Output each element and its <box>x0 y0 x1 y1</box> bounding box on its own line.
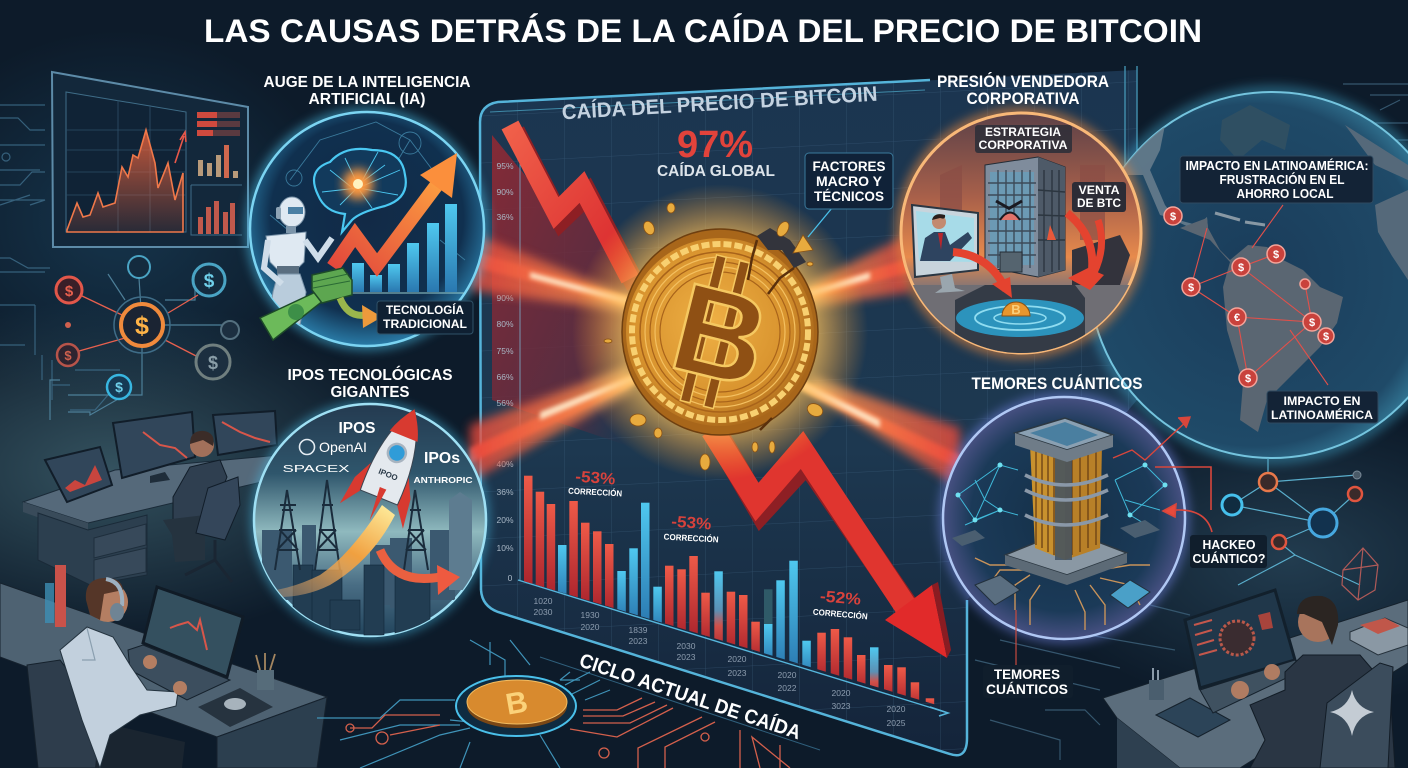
red arrow to pool <box>953 252 1012 298</box>
person <box>173 460 227 527</box>
year labels: 2020 <box>778 670 797 680</box>
red area under arrow <box>492 135 640 450</box>
red arrow of selling <box>1067 213 1104 290</box>
north america <box>1220 105 1290 160</box>
correction labels: -52% <box>819 588 862 609</box>
desk <box>23 455 280 523</box>
green to orange arrow <box>340 298 366 315</box>
label: current cycle: CICLO ACTUAL DE CAÍDA <box>577 649 804 744</box>
skyline <box>262 492 472 608</box>
year labels: 2023 <box>728 668 747 678</box>
blue bars <box>352 204 457 292</box>
IPO company labels <box>282 420 472 485</box>
central chart panel <box>480 66 1137 755</box>
monitors <box>45 447 112 502</box>
glowing brain <box>314 149 406 232</box>
red trend arrow beyond quantum bubble <box>1113 417 1190 460</box>
tablet <box>1156 698 1230 737</box>
correction labels: -53% <box>671 514 712 533</box>
person and chair <box>27 660 112 768</box>
map nodes <box>1164 207 1334 387</box>
left circuit traces <box>0 105 120 410</box>
circuit traces <box>975 558 1150 630</box>
oil derricks <box>275 480 428 570</box>
label: BTC sale: DE BTC <box>1077 196 1121 210</box>
year labels <box>534 596 906 728</box>
bubble: globe Latin America: $ <box>1323 331 1329 343</box>
hack pointer <box>1155 467 1212 532</box>
IPO company labels: SPACEX <box>282 464 350 475</box>
central dollar node: $ <box>135 312 149 340</box>
red curved arrow <box>380 550 440 578</box>
correction labels: CORRECCIÓN <box>568 485 622 498</box>
callout: macro and technical factors: FACTORES <box>812 159 886 174</box>
watermark star <box>1330 690 1374 736</box>
callout: macro and technical factors: TÉCNICOS <box>814 189 884 204</box>
label: quantum hack: HACKEO <box>1202 537 1256 552</box>
flame trail <box>278 505 395 597</box>
label: impact in Latin America with frustration: IMPACTO EN LATINOAMÉRICA: <box>1186 158 1368 173</box>
analyst on the right <box>1103 590 1408 768</box>
year labels: 2020 <box>887 704 906 714</box>
analyst at front desk <box>0 565 327 768</box>
ground and pool <box>912 285 1130 353</box>
network mesh <box>958 465 1165 530</box>
person <box>1250 655 1395 768</box>
bar chart <box>524 476 934 713</box>
callout: macro and technical factors <box>805 153 893 237</box>
y axis labels: 36% <box>496 212 514 222</box>
red falling arrow <box>510 125 951 658</box>
y axis labels: 40% <box>496 459 514 469</box>
south america <box>1180 218 1343 432</box>
laptop <box>143 587 243 677</box>
network of currency nodes: $ <box>208 353 218 373</box>
wall screen with rising chart <box>52 72 248 247</box>
chart heading: CAÍDA DEL PRECIO DE BITCOIN <box>561 83 878 124</box>
rocket: IPOO <box>377 467 399 483</box>
y axis labels: 0 <box>508 573 513 583</box>
correction labels: CORRECCIÓN <box>663 531 719 544</box>
mouse pad, mouse and pen cup <box>198 688 273 727</box>
label: impact in Latin America with frustration: FRUSTRACIÓN EN EL <box>1220 172 1345 187</box>
year labels: 2025 <box>887 718 906 728</box>
heading: artificial intelligence: AUGE DE LA INTELIGENCIA <box>264 74 471 91</box>
label: traditional technology: TECNOLOGÍA <box>386 302 464 317</box>
year labels: 1839 <box>629 625 648 635</box>
label: impact in Latin America: IMPACTO EN <box>1284 394 1360 408</box>
network of currency nodes <box>50 256 239 420</box>
heading: corporate selling pressure: PRESIÓN VENDEDORA <box>937 72 1109 91</box>
year labels: 2020 <box>581 622 600 632</box>
y axis labels: 75% <box>496 346 514 356</box>
y axis labels: 10% <box>496 543 514 553</box>
analyst at back desk <box>23 411 280 585</box>
heading: corporate selling pressure <box>937 72 1109 108</box>
y axis labels <box>496 161 514 583</box>
year labels: 2020 <box>832 688 851 698</box>
heading: tech IPOs <box>288 366 452 401</box>
bubble: artificial intelligence <box>245 107 489 351</box>
bitcoin symbol: B <box>659 255 782 414</box>
bubble: globe Latin America: $ <box>1273 249 1279 261</box>
correction labels: -53% <box>575 469 616 488</box>
IPO company labels: ANTHROPIC <box>414 475 472 485</box>
bubble: tech IPOs <box>240 397 490 640</box>
line chart <box>67 130 183 232</box>
year labels: 1930 <box>581 610 600 620</box>
angry office building <box>985 157 1065 277</box>
97% global drop <box>657 124 775 180</box>
small red arrow <box>175 132 186 163</box>
small coin on circuit board <box>317 640 790 768</box>
y axis labels: 20% <box>496 515 514 525</box>
books <box>1350 618 1408 655</box>
bubble: globe Latin America: $ <box>1188 282 1194 294</box>
bubble: globe Latin America: $ <box>1245 373 1251 385</box>
97% global drop: 97% <box>677 124 753 166</box>
small coin on circuit board: B <box>503 685 530 722</box>
chair <box>196 477 240 540</box>
dollar bills <box>260 268 352 340</box>
network of currency nodes: $ <box>64 348 72 363</box>
IPO company labels: OpenAI <box>319 439 367 455</box>
label: traditional technology <box>377 301 473 334</box>
bubble: corporate selling pressure <box>895 107 1150 360</box>
y axis labels: 56% <box>496 398 514 408</box>
small bitcoin: B <box>1011 302 1021 317</box>
label: quantum hack <box>1190 535 1267 568</box>
chair <box>1320 663 1393 768</box>
label: quantum fears lower: CUÁNTICOS <box>986 682 1068 697</box>
rocket <box>338 397 446 533</box>
year labels: 2022 <box>778 683 797 693</box>
callout: macro and technical factors: MACRO Y <box>816 174 882 189</box>
IPO company labels: IPOs <box>424 450 460 467</box>
small bitcoin <box>1002 302 1030 317</box>
circuit and map traces on lower right <box>975 84 1408 760</box>
bubble: globe Latin America: $ <box>1170 211 1176 223</box>
mini bars on desk <box>45 583 54 623</box>
title: LAS CAUSAS DETRÁS DE LA CAÍDA DEL PRECIO DE BITCOIN <box>204 13 1202 49</box>
label: quantum hack: CUÁNTICO? <box>1192 551 1266 566</box>
label: corporate strategy: ESTRATEGIA <box>985 127 1061 139</box>
bubble: globe Latin America: $ <box>1238 262 1244 274</box>
light beams into the coin <box>470 232 960 488</box>
label: impact in Latin America with frustration <box>1180 156 1373 203</box>
heading: artificial intelligence: ARTIFICIAL (IA) <box>308 91 426 108</box>
pen holder <box>1149 680 1164 700</box>
crack and shards <box>757 228 806 268</box>
label: BTC sale <box>1072 182 1126 212</box>
robot <box>264 197 332 325</box>
bubble: globe Latin America <box>1082 85 1408 465</box>
label: impact in Latin America with frustration: AHORRO LOCAL <box>1236 187 1334 201</box>
y axis labels: 80% <box>496 319 514 329</box>
monitor with executive <box>912 205 978 293</box>
y axis labels: 95% <box>496 161 514 171</box>
label: corporate strategy: CORPORATIVA <box>978 140 1068 152</box>
label: impact in Latin America: LATINOAMÉRICA <box>1271 407 1373 422</box>
bubble: globe Latin America: $ <box>1309 317 1315 329</box>
year labels: 2023 <box>677 652 696 662</box>
label: corporate strategy <box>975 125 1072 153</box>
laptop <box>1185 590 1295 688</box>
year labels: 3023 <box>832 701 851 711</box>
year labels: 2030 <box>534 607 553 617</box>
year labels: 2020 <box>728 654 747 664</box>
heading: tech IPOs: GIGANTES <box>330 384 410 401</box>
rising orange arrow <box>333 153 457 267</box>
heading: quantum fears: TEMORES CUÁNTICOS <box>972 374 1142 393</box>
network of currency nodes: $ <box>65 283 74 300</box>
label: quantum fears lower <box>983 665 1073 698</box>
cracked bitcoin coin <box>572 184 868 480</box>
y axis labels: 36% <box>496 487 514 497</box>
label: impact in Latin America <box>1267 391 1378 423</box>
network of currency nodes: $ <box>204 271 215 292</box>
year labels: 2030 <box>677 641 696 651</box>
label: BTC sale: VENTA <box>1078 183 1120 197</box>
97% global drop: CAÍDA GLOBAL <box>657 161 775 180</box>
year labels: 2023 <box>629 636 648 646</box>
label: traditional technology: TRADICIONAL <box>383 317 467 331</box>
heading: artificial intelligence <box>264 74 471 108</box>
y axis labels: 90% <box>496 187 514 197</box>
bubble: globe Latin America: € <box>1234 312 1240 324</box>
label: quantum fears lower: TEMORES <box>994 667 1060 682</box>
correction labels: CORRECCIÓN <box>812 606 868 621</box>
year labels: 1020 <box>534 596 553 606</box>
quantum tower <box>1005 418 1127 585</box>
y axis labels: 66% <box>496 372 514 382</box>
connection lines <box>1191 205 1328 385</box>
bubble: quantum computer <box>938 392 1190 644</box>
y axis labels: 90% <box>496 293 514 303</box>
heading: tech IPOs: IPOS TECNOLÓGICAS <box>288 366 452 384</box>
right node network <box>1222 458 1378 600</box>
IPO company labels: IPOS <box>338 420 376 437</box>
correction labels <box>568 469 868 621</box>
heading: corporate selling pressure: CORPORATIVA <box>966 90 1080 108</box>
central dollar node <box>114 297 170 353</box>
network of currency nodes: $ <box>115 379 123 395</box>
